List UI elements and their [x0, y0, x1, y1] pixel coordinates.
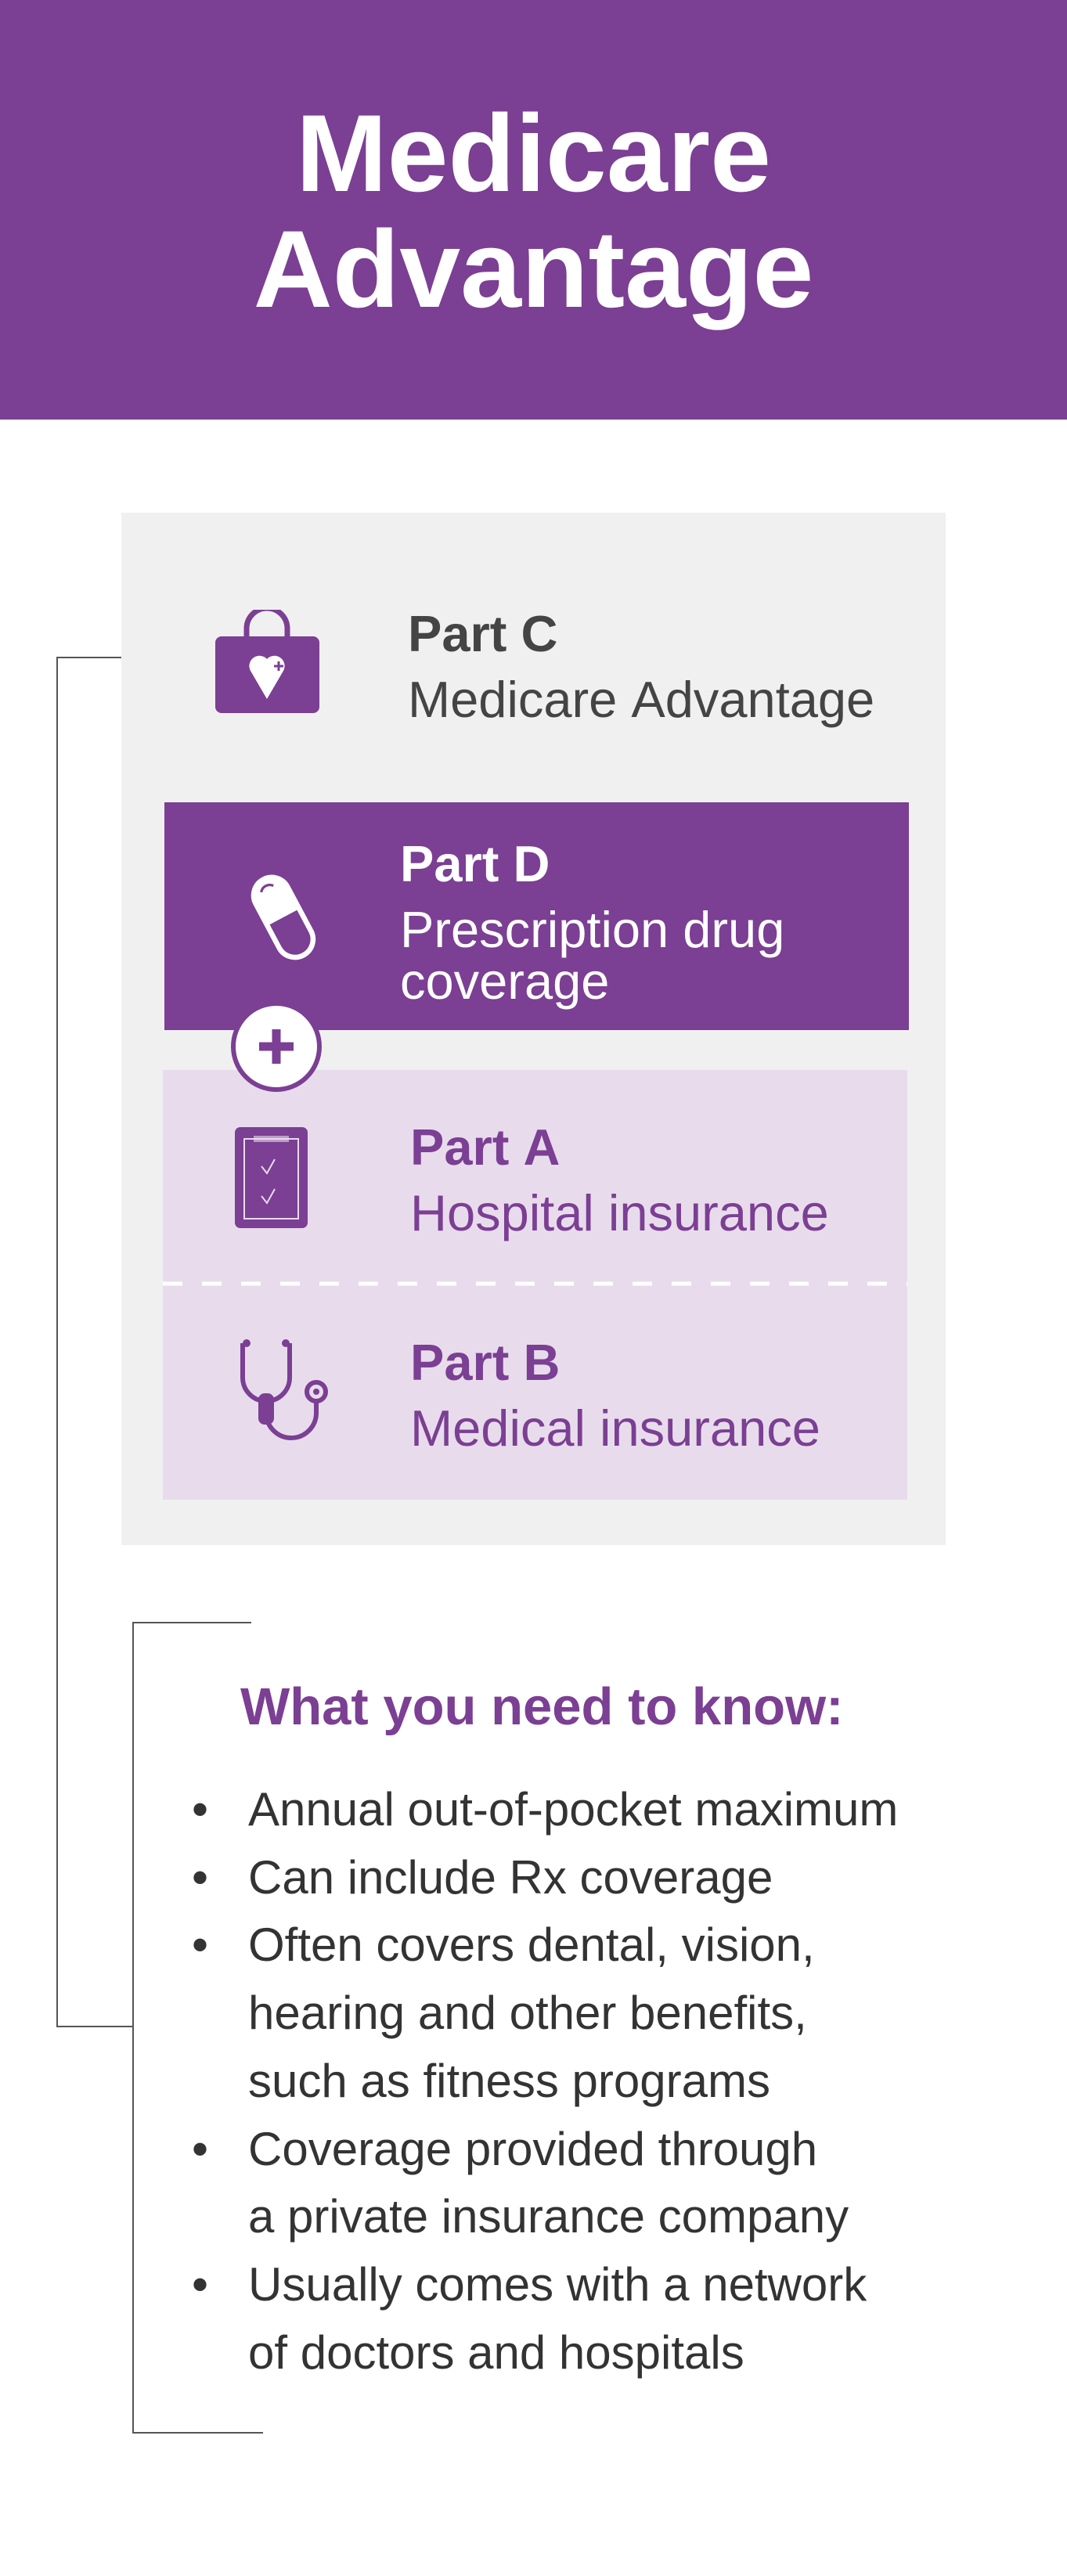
- bullet list: of doctors and hospitals: [248, 2326, 744, 2379]
- bullet list: such as fitness programs: [248, 2055, 770, 2107]
- bullet list: hearing and other benefits,: [248, 1987, 807, 2039]
- Part A text: Part A: [410, 1119, 560, 1176]
- icon: pill: [251, 875, 316, 960]
- title: Advantage: [254, 207, 813, 330]
- icon: plus circle: [231, 1006, 322, 1092]
- bullet list: •: [192, 1783, 208, 1836]
- bullet list: Can include Rx coverage: [248, 1851, 773, 1904]
- dashed divider: [163, 1282, 907, 1285]
- icon: stethoscope: [240, 1339, 328, 1440]
- bullet list: •: [192, 1918, 208, 1971]
- heading: what you need to know: What you need to know:: [240, 1677, 843, 1736]
- bullet list: Often covers dental, vision,: [248, 1918, 815, 1971]
- Part D text: [400, 835, 784, 1010]
- panel: Parts A and B: [163, 1070, 907, 1500]
- bullet list: Coverage provided through: [248, 2123, 817, 2175]
- Part D text: Part D: [400, 835, 550, 892]
- header banner: [0, 0, 1067, 420]
- Part D text: Prescription drug: [400, 901, 784, 958]
- bullet list: •: [192, 1851, 208, 1904]
- panel: Part D: [164, 802, 909, 1030]
- Part B text: Medical insurance: [410, 1400, 820, 1457]
- title: Medicare: [296, 92, 771, 214]
- Part B text: Part B: [410, 1334, 560, 1391]
- icon: clipboard: [235, 1127, 308, 1228]
- Part A text: Hospital insurance: [410, 1184, 829, 1241]
- panel: parts: Medicare Advantage: [408, 671, 874, 728]
- bullet list: [192, 1783, 898, 2379]
- bullet list: a private insurance company: [248, 2190, 849, 2243]
- bullet list: •: [192, 2123, 208, 2175]
- icon: bag with heart: [215, 610, 319, 713]
- bullet list: Usually comes with a network: [248, 2258, 867, 2311]
- bullet list: •: [192, 2258, 208, 2311]
- Part C text: [408, 605, 874, 728]
- Part A text: [410, 1119, 829, 1241]
- Part D text: coverage: [400, 953, 609, 1010]
- panel: parts: [121, 513, 946, 1545]
- title: [254, 92, 813, 330]
- Part B text: [410, 1334, 820, 1457]
- panel: parts: Part C: [408, 605, 557, 662]
- bullet list: Annual out-of-pocket maximum: [248, 1783, 898, 1836]
